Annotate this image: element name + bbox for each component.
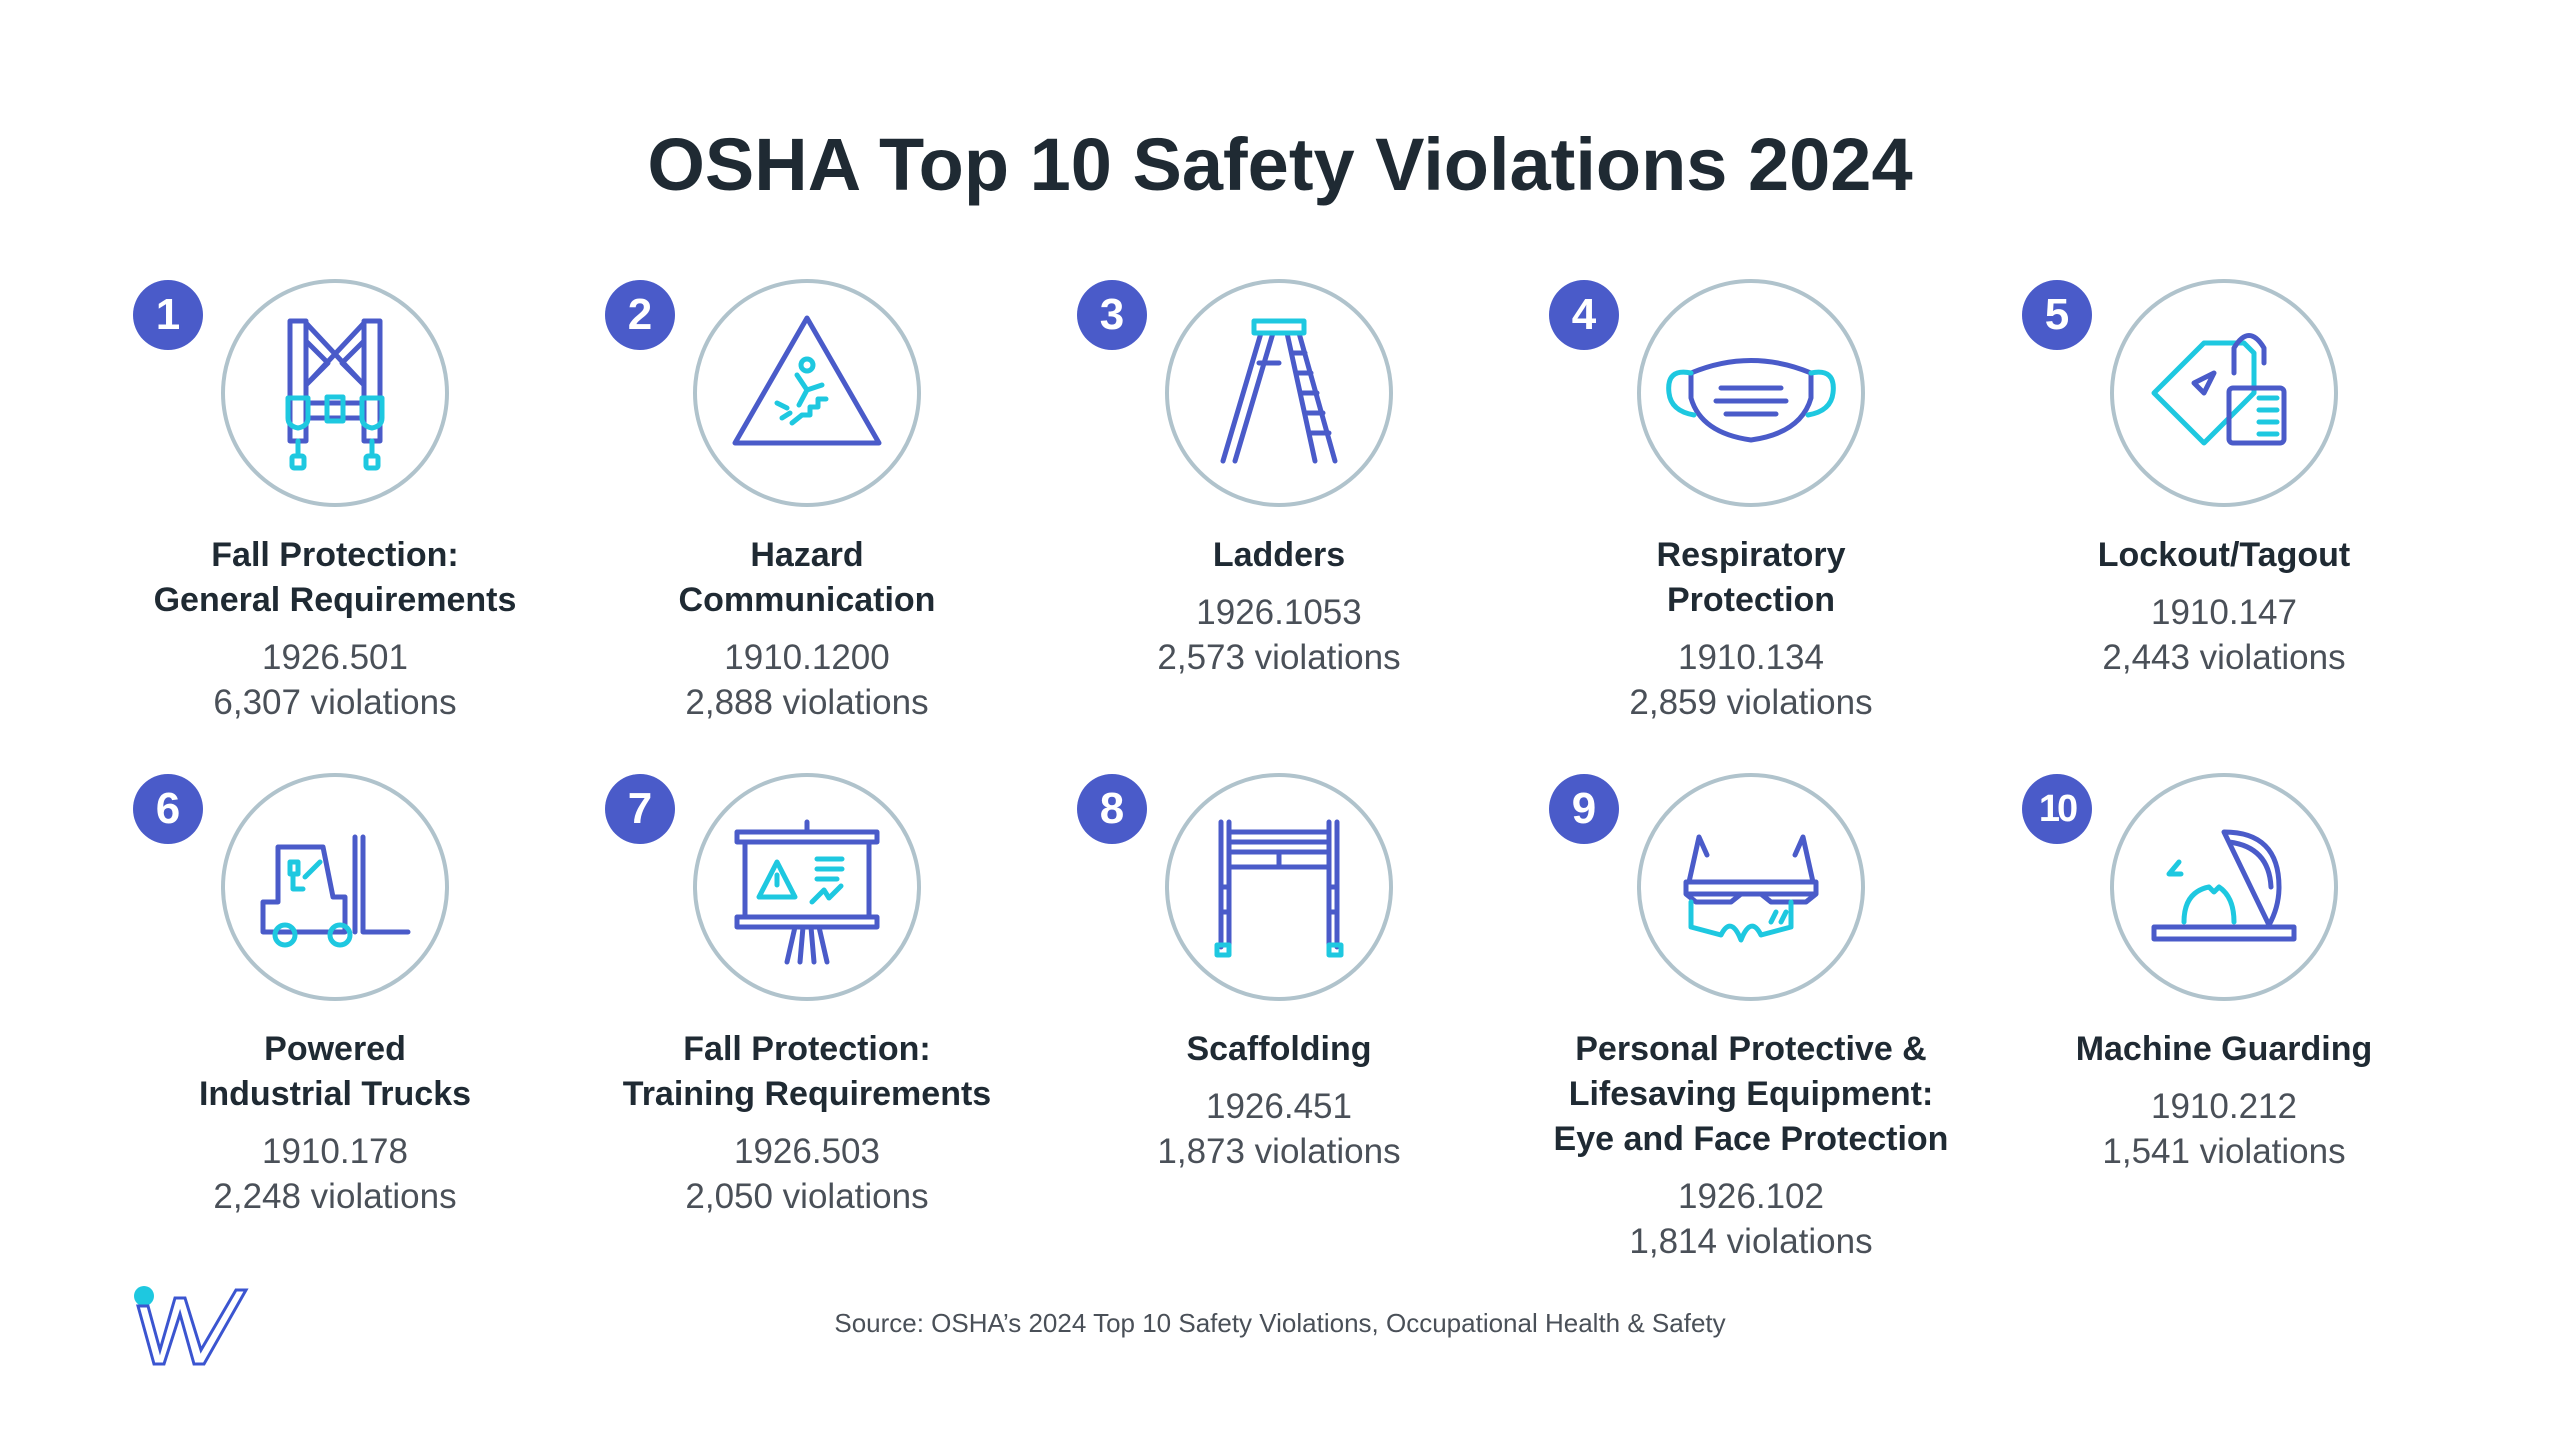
- title: OSHA Top 10 Safety Violations 2024: [647, 123, 1913, 206]
- badge 2: 2: [628, 290, 652, 339]
- text 9: Eye and Face Protection: [1554, 1120, 1948, 1158]
- text 10: 1,541 violations: [2102, 1132, 2346, 1171]
- text 4: 1910.134: [1678, 638, 1824, 677]
- item 4: respiratory: [1549, 279, 1873, 722]
- item 7: fall protection training: [605, 773, 991, 1216]
- badge 9: 9: [1572, 784, 1596, 833]
- text 4: Respiratory: [1657, 536, 1845, 574]
- item 3: ladders: [1077, 279, 1401, 677]
- badge 1: 1: [156, 290, 180, 339]
- logo: [134, 1286, 248, 1366]
- text 2: Hazard: [750, 536, 864, 574]
- text 8: [1157, 1030, 1401, 1171]
- text 8: Scaffolding: [1186, 1030, 1372, 1068]
- badge 10: 10: [2039, 788, 2075, 830]
- text 7: Fall Protection:: [683, 1030, 931, 1068]
- text 10: Machine Guarding: [2076, 1030, 2372, 1068]
- badge 7: [605, 774, 675, 844]
- badge 6: [133, 774, 203, 844]
- badge 3: [1077, 280, 1147, 350]
- text 2: 2,888 violations: [685, 683, 929, 722]
- text 1: General Requirements: [154, 581, 516, 619]
- text 4: Protection: [1667, 581, 1835, 619]
- text 4: [1629, 536, 1873, 722]
- badge 8: [1077, 774, 1147, 844]
- item 9: eye protection: [1549, 773, 1948, 1261]
- badge 8: 8: [1100, 784, 1124, 833]
- text 5: 2,443 violations: [2102, 638, 2346, 677]
- text 3: 1926.1053: [1196, 593, 1362, 632]
- icon: goggles: [1637, 773, 1865, 1001]
- icon: saw guard: [2110, 773, 2338, 1001]
- text 4: 2,859 violations: [1629, 683, 1873, 722]
- text 6: Industrial Trucks: [199, 1075, 471, 1113]
- text 2: Communication: [679, 581, 935, 619]
- badge 4: [1549, 280, 1619, 350]
- icon: tag and lock: [2110, 279, 2338, 507]
- icon: ladder: [1165, 279, 1393, 507]
- text 9: [1554, 1030, 1948, 1261]
- text 9: 1,814 violations: [1629, 1222, 1873, 1261]
- badge 3: 3: [1100, 290, 1124, 339]
- text 1: 1926.501: [262, 638, 408, 677]
- item 2: hazard communication: [605, 279, 935, 722]
- text 1: Fall Protection:: [211, 536, 459, 574]
- text 7: [623, 1030, 991, 1216]
- text 5: [2098, 536, 2350, 677]
- icon: harness: [221, 279, 449, 507]
- text 5: 1910.147: [2151, 593, 2297, 632]
- text 5: Lockout/Tagout: [2098, 536, 2350, 574]
- icon: warning triangle: [693, 279, 921, 507]
- badge 1: [133, 280, 203, 350]
- text 6: 1910.178: [262, 1132, 408, 1171]
- text 10: 1910.212: [2151, 1087, 2297, 1126]
- text 10: [2076, 1030, 2372, 1171]
- item 1: fall protection general: [133, 279, 516, 722]
- text 2: 1910.1200: [724, 638, 890, 677]
- badge 5: [2022, 280, 2092, 350]
- item 6: powered industrial trucks: [133, 773, 471, 1216]
- badge 10: [2022, 774, 2092, 844]
- icon: forklift: [221, 773, 449, 1001]
- text 3: Ladders: [1213, 536, 1345, 574]
- text 3: 2,573 violations: [1157, 638, 1401, 677]
- item 5: lockout tagout: [2022, 279, 2350, 677]
- icon: presentation board: [693, 773, 921, 1001]
- item 8: scaffolding: [1077, 773, 1401, 1171]
- badge 6: 6: [156, 784, 180, 833]
- item 10: machine guarding: [2022, 773, 2372, 1171]
- text 8: 1,873 violations: [1157, 1132, 1401, 1171]
- text 7: 1926.503: [734, 1132, 880, 1171]
- text 1: 6,307 violations: [213, 683, 457, 722]
- text 8: 1926.451: [1206, 1087, 1352, 1126]
- text 9: Lifesaving Equipment:: [1569, 1075, 1933, 1113]
- badge 5: 5: [2045, 290, 2069, 339]
- badge 2: [605, 280, 675, 350]
- text 6: Powered: [264, 1030, 406, 1068]
- text 2: [679, 536, 935, 722]
- text 3: [1157, 536, 1401, 677]
- text 1: [154, 536, 516, 722]
- text 6: 2,248 violations: [213, 1177, 457, 1216]
- source: Source: OSHA’s 2024 Top 10 Safety Violations, Occupational Health & Safety: [834, 1308, 1726, 1338]
- badge 9: [1549, 774, 1619, 844]
- text 9: Personal Protective &: [1575, 1030, 1927, 1068]
- badge 7: 7: [628, 784, 652, 833]
- text 7: 2,050 violations: [685, 1177, 929, 1216]
- icon: scaffold: [1165, 773, 1393, 1001]
- text 6: [199, 1030, 471, 1216]
- text 9: 1926.102: [1678, 1177, 1824, 1216]
- text 7: Training Requirements: [623, 1075, 991, 1113]
- icon: mask: [1637, 279, 1865, 507]
- badge 4: 4: [1572, 290, 1596, 339]
